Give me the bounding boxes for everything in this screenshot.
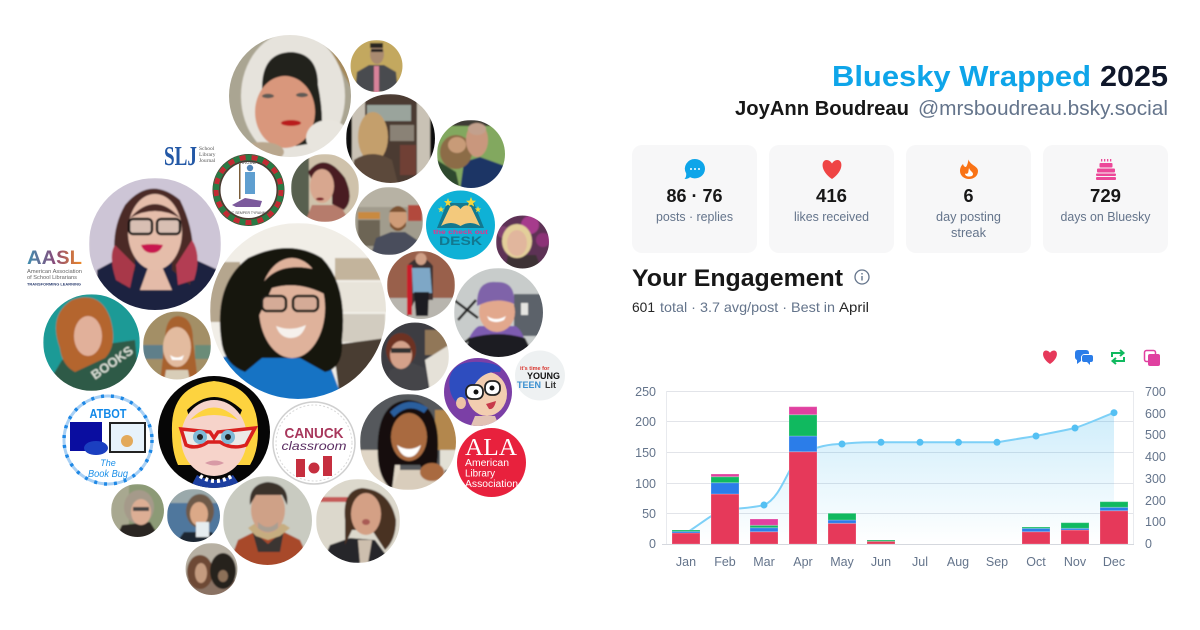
title: 2025 (1100, 61, 1168, 93)
bar Dec (1100, 502, 1128, 544)
user name and handle: @mrsboudreau.bsky.social (918, 98, 1168, 120)
logo: School Library Journal: School (199, 146, 215, 152)
logo: American Library Association: ALA (465, 435, 518, 461)
month labels: Jun (871, 555, 891, 569)
icon: chat bubble (684, 159, 705, 179)
month labels: Feb (714, 555, 736, 569)
left axis labels: 0 (649, 537, 656, 551)
avatar: red-haired woman in BOOKS shirt: BOOKS (88, 343, 136, 382)
logo: School Library Journal: Journal (199, 158, 216, 164)
logo: School Library Journal: Library (199, 152, 216, 158)
user name and handle: JoyAnn Boudreau (735, 98, 909, 120)
avatar: the check out desk logo: DESK (439, 236, 483, 248)
stat card: day posting streak: day posting (936, 209, 1001, 224)
month labels: Sep (986, 555, 1008, 569)
logo: AASL: TRANSFORMING LEARNING (27, 282, 81, 286)
icon: heart (823, 160, 841, 179)
avatar: couple outdoors (437, 120, 507, 190)
icon: flame (960, 160, 978, 179)
month labels: Jul (912, 555, 928, 569)
line points (760, 409, 1118, 508)
logo: ATBOT The Book Bug: Book Bug (88, 469, 128, 480)
avatar: cartoon with blue hair (444, 358, 512, 428)
left axis labels: 200 (635, 415, 656, 429)
month labels: Dec (1103, 555, 1125, 569)
stat card: days on Bluesky: days on Bluesky (1060, 209, 1151, 224)
logo: Canuck Classroom (273, 402, 355, 484)
logo: Virginia state seal: VIRGINIA (239, 160, 258, 165)
avatar: man on market street (355, 187, 423, 255)
bar Oct (1022, 527, 1050, 544)
bar Jan (672, 530, 700, 544)
logo: American Library Association: American (465, 458, 509, 469)
avatar: woman in purple knit hat (454, 268, 544, 360)
right axis labels: 400 (1145, 450, 1166, 464)
cumulative area (686, 413, 1114, 544)
left axis labels (635, 385, 656, 551)
avatar: smiling man in rust jacket (223, 476, 313, 566)
bar Nov (1061, 523, 1089, 544)
stat card: likes received: 416 (816, 186, 847, 206)
logo: Virginia state seal (212, 154, 284, 226)
avatar: the check out desk logo: the check out (433, 229, 489, 236)
avatar: woman at bookshelves (346, 94, 436, 184)
user name and handle (735, 98, 1168, 120)
stat card: likes received (769, 145, 894, 253)
logo: AASL: of School Librarians (27, 275, 77, 281)
avatar: the check out desk logo (426, 190, 495, 260)
right axis labels: 200 (1145, 494, 1166, 508)
stat card: posts and replies: posts · replies (656, 209, 733, 224)
stat card: posts and replies: 86 · 76 (666, 186, 722, 206)
avatar collage (27, 32, 565, 596)
left axis labels: 250 (635, 385, 656, 399)
stat card: day posting streak (906, 145, 1031, 253)
avatar: cartoon woman with red glasses (158, 376, 270, 488)
logo: ATBOT The Book Bug: The (100, 458, 116, 468)
avatar: two dogs (185, 543, 239, 596)
right axis labels: 100 (1145, 515, 1166, 529)
avatar: woman with long auburn hair (143, 311, 211, 382)
logo: ATBOT The Book Bug (62, 394, 154, 486)
stat card: days on Bluesky: 729 (1090, 186, 1121, 206)
bar Jun (867, 540, 895, 544)
cumulative line (686, 413, 1114, 533)
stat card: day posting streak: streak (951, 225, 986, 240)
bar Mar (750, 519, 778, 544)
avatar: older woman with glasses (111, 484, 165, 538)
logo: AASL: American Association (27, 269, 82, 275)
avatar: woman with red-tipped hair (89, 178, 221, 312)
engagement summary: total · 3.7 avg/post · Best in (660, 299, 835, 315)
engagement combo chart (635, 385, 1166, 569)
month labels: Aug (947, 555, 969, 569)
stat card: posts and replies (632, 145, 757, 253)
icon: likes heart (1043, 350, 1057, 364)
stacked bars (672, 407, 1128, 544)
grid lines (662, 391, 1134, 544)
avatar: woman with dark red hair (291, 154, 359, 222)
month labels (676, 555, 1125, 569)
engagement summary: 601 (632, 299, 655, 315)
icon: info (855, 270, 869, 284)
right axis labels (1145, 385, 1166, 551)
month labels: Jan (676, 555, 696, 569)
avatar: woman making kiss face (316, 479, 400, 563)
bar May (828, 513, 856, 544)
right axis labels: 600 (1145, 407, 1166, 421)
avatar: blonde woman with flowers (496, 215, 550, 270)
stat card: likes received: likes received (794, 209, 869, 224)
right axis labels: 500 (1145, 428, 1166, 442)
logo: AASL: AASL (27, 248, 82, 269)
avatar: woman in red doorway (387, 251, 455, 320)
month labels: May (830, 555, 855, 569)
logo: American Library Association: Library (465, 468, 495, 480)
left axis labels: 150 (635, 446, 656, 460)
icon: replies bubbles (1075, 350, 1093, 365)
logo: Canuck Classroom: classroom (282, 439, 346, 453)
stat card: day posting streak: 6 (963, 186, 974, 206)
icon: birthday cake (1096, 159, 1116, 180)
left axis labels: 50 (642, 507, 656, 521)
engagement summary: April (839, 299, 869, 315)
logo: Canuck Classroom: CANUCK (284, 425, 344, 442)
month labels: Mar (753, 555, 775, 569)
avatar: woman in santa hood (228, 32, 355, 162)
icon: reposts arrows (1112, 350, 1124, 364)
right axis labels: 700 (1145, 385, 1166, 399)
title: Bluesky Wrapped (832, 61, 1091, 93)
right axis labels: 0 (1145, 537, 1152, 551)
bar Feb (711, 474, 739, 544)
logo: Young Teen Lit: it's time for (520, 366, 550, 372)
avatar: woman drinking from cup (167, 489, 221, 543)
avatar: woman with glasses at desk (381, 322, 449, 392)
logo: Young Teen Lit: YOUNG (527, 371, 560, 381)
logo: Young Teen Lit (515, 350, 565, 401)
logo: ATBOT The Book Bug: ATBOT (90, 406, 127, 421)
logo: AASL (27, 248, 82, 286)
chart legend (1043, 350, 1160, 366)
stat card: days on Bluesky (1043, 145, 1168, 253)
bar Apr (789, 407, 817, 544)
month labels: Nov (1064, 555, 1087, 569)
logo: Young Teen Lit: Lit (545, 380, 556, 390)
avatar: smiling woman with long braids (360, 394, 457, 490)
logo: Virginia state seal: SIC SEMPER TYRANNIS (228, 211, 269, 215)
month labels: Apr (793, 555, 813, 569)
left axis labels: 100 (635, 477, 656, 491)
heading: Your Engagement: Your Engagement (632, 265, 843, 292)
logo: School Library Journal: SLJ (164, 141, 197, 171)
logo: Young Teen Lit: TEEN (517, 380, 541, 390)
icon: quotes copy (1144, 350, 1160, 366)
month labels: Oct (1026, 555, 1046, 569)
logo: American Library Association: Association (465, 479, 518, 490)
logo: American Library Association (457, 428, 526, 497)
right axis labels: 300 (1145, 472, 1166, 486)
avatar: man with pink tie (350, 40, 404, 94)
avatar: red-haired woman in BOOKS shirt (43, 294, 140, 392)
avatar: main profile photo woman with glasses (210, 223, 387, 400)
